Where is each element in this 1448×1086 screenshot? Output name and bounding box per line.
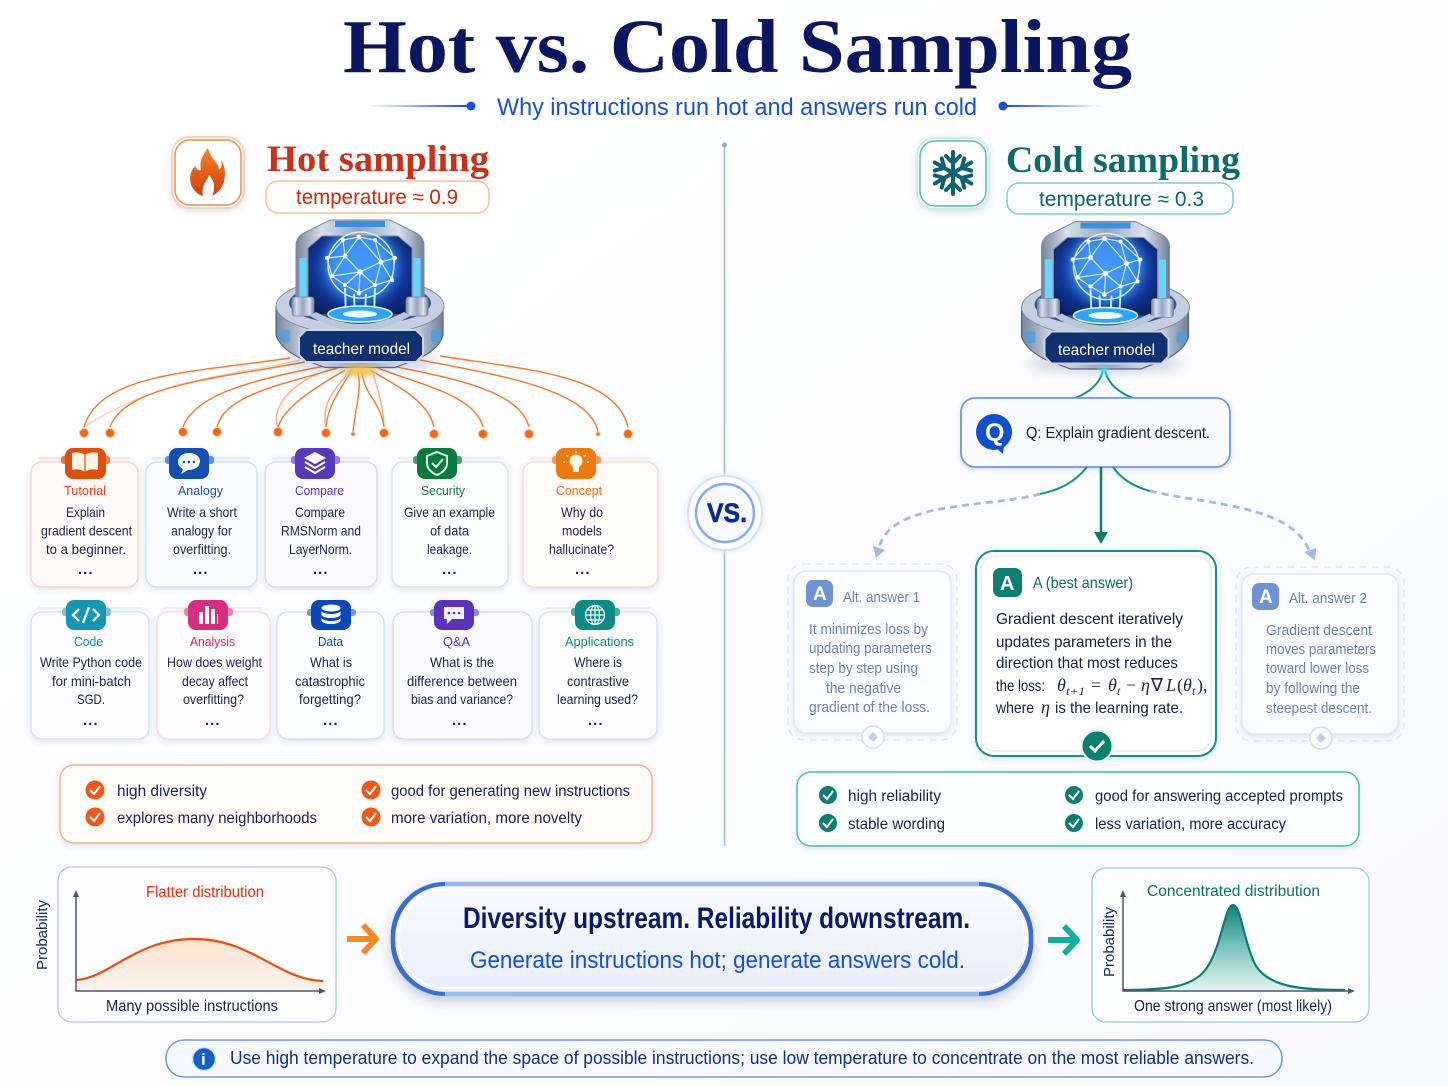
card: alt answer 2: A [1259, 587, 1273, 608]
card: data: catastrophic [295, 673, 365, 689]
footer note [166, 1040, 1282, 1077]
card: analogy: ... [193, 561, 209, 578]
card: tutorial: to a beginner. [46, 541, 126, 557]
equation: θ [1057, 675, 1066, 695]
card: compare: LayerNorm. [289, 541, 352, 557]
card: q&a: bias and variance? [411, 691, 513, 707]
card: analysis: decay affect [182, 673, 248, 689]
key message banner: Generate instructions hot; generate answers cold. [470, 947, 965, 974]
arrows: question to answers [873, 467, 1316, 560]
equation: ∇ [1150, 675, 1164, 695]
card: best answer: the loss: [996, 678, 1045, 695]
card: applications: learning used? [557, 691, 638, 707]
card: compare: ... [313, 561, 329, 578]
chart: concentrated distribution: One strong answer (most likely) [1134, 998, 1332, 1015]
panel: cold benefits [797, 772, 1359, 846]
vs. badge [686, 474, 764, 552]
temperature pill: cold [1007, 183, 1233, 214]
card: best answer: direction that most reduces [996, 655, 1178, 672]
card: data: What is [310, 654, 352, 670]
temperature pill: hot [266, 181, 489, 213]
connector: model to question [1073, 367, 1135, 399]
vs. badge: VS. [707, 498, 747, 528]
card: best answer: η [1041, 697, 1050, 717]
equation: θ [1108, 675, 1117, 695]
card: alt answer 2: Gradient descent [1266, 623, 1372, 639]
question box: Q [985, 419, 1004, 447]
panel: cold benefits: less variation, more accuracy [1095, 816, 1286, 833]
arrow: teal [1048, 926, 1077, 954]
fan of orange lines to instructions [80, 356, 632, 438]
card: concept: ... [575, 561, 591, 578]
card: analogy [146, 448, 257, 587]
card: alt answer 1: It minimizes loss by [809, 622, 929, 638]
card: code: SGD. [77, 691, 105, 707]
equation: = [1091, 675, 1101, 695]
teacher model: cold: teacher model [1058, 342, 1155, 359]
card: best answer [976, 551, 1216, 762]
card: tutorial: Tutorial [64, 483, 106, 498]
chart: flatter distribution [34, 867, 336, 1022]
card: analysis [157, 600, 270, 739]
icon: snowflake [917, 138, 989, 209]
card: alt answer 2: moves parameters [1266, 642, 1376, 658]
equation: η [1141, 675, 1150, 695]
temperature pill: cold: temperature ≈ 0.3 [1039, 188, 1204, 211]
card: alt answer 1: A [813, 584, 827, 605]
card: data: forgetting? [299, 691, 361, 707]
card: q&a [393, 600, 532, 739]
card: best answer: updates parameters in the [996, 634, 1172, 651]
heading: cold sampling: Cold sampling [1006, 140, 1241, 181]
icon: flame [172, 137, 244, 208]
panel: hot benefits: explores many neighborhoods [117, 810, 317, 827]
card: code: for mini-batch [52, 673, 131, 689]
card: q&a: What is the [430, 654, 494, 670]
panel: hot benefits: good for generating new instructions [391, 783, 630, 800]
card: code: ... [83, 712, 99, 729]
card: compare: Compare [295, 483, 344, 498]
chart: concentrated distribution: Probability [1101, 907, 1118, 977]
equation [1057, 675, 1208, 698]
card: concept: hallucinate? [549, 541, 614, 557]
card: tutorial: Explain [66, 504, 105, 520]
card: applications: Where is [574, 654, 622, 670]
panel: hot benefits: more variation, more novelty [391, 810, 582, 827]
card: applications: contrastive [567, 673, 629, 689]
teacher model: cold [1022, 222, 1190, 372]
card: data: Data [318, 634, 344, 649]
card: compare [265, 448, 377, 587]
subtitle with side rules [368, 94, 1102, 121]
equation: θ [1183, 675, 1192, 695]
card: applications: ... [588, 712, 604, 729]
subtitle with side rules: Why instructions run hot and answers run cold [497, 94, 977, 121]
panel: cold benefits: stable wording [848, 816, 945, 833]
card: security: Security [421, 483, 465, 498]
chart: concentrated distribution: Concentrated distribution [1147, 883, 1320, 900]
card: alt answer 1: Alt. answer 1 [843, 590, 920, 606]
card: concept: models [562, 522, 602, 538]
card: security: leakage. [427, 541, 472, 557]
equation: t [1117, 684, 1121, 698]
card: analogy: analogy for [171, 522, 232, 538]
card: concept: Why do [561, 504, 603, 520]
chart: flatter distribution: Many possible instructions [106, 998, 278, 1015]
temperature pill: hot: temperature ≈ 0.9 [296, 186, 458, 209]
teacher model: hot [276, 220, 444, 376]
card: alt answer 2: Alt. answer 2 [1289, 591, 1367, 607]
card: alt answer 1: gradient of the loss. [809, 700, 930, 716]
card: data [277, 600, 384, 739]
card: compare: RMSNorm and [281, 522, 361, 538]
card: security [392, 448, 508, 587]
card: security: Give an example [404, 504, 495, 520]
card: security: of data [430, 522, 469, 538]
card: q&a: ... [452, 712, 468, 729]
card: analysis: ... [205, 712, 221, 729]
card: code: Write Python code [40, 654, 142, 670]
equation: ( [1177, 675, 1183, 696]
card: alt answer 1: updating parameters [809, 641, 932, 657]
card: applications [539, 600, 657, 739]
equation: t [1192, 684, 1196, 698]
card: concept [523, 448, 658, 587]
card: alt answer 1 [788, 564, 957, 748]
teacher model: hot: teacher model [313, 341, 410, 358]
card: best answer: is the learning rate. [1055, 700, 1183, 717]
key message banner [393, 884, 1031, 994]
card: best answer: Gradient descent iteratively [996, 611, 1183, 628]
card: data: ... [323, 712, 339, 729]
panel: hot benefits: high diversity [117, 783, 207, 800]
card: alt answer 2: toward lower loss [1266, 661, 1369, 677]
card: q&a: Q&A [443, 634, 470, 649]
card: applications: Applications [565, 634, 634, 649]
equation: ), [1197, 675, 1208, 696]
card: best answer: A (best answer) [1033, 575, 1133, 592]
card: tutorial [31, 448, 138, 587]
card: alt answer 2: by following the [1266, 681, 1360, 697]
equation: − [1126, 675, 1136, 695]
card: tutorial: ... [78, 561, 94, 578]
card: analysis: Analysis [190, 634, 235, 649]
card: alt answer 2: steepest descent. [1266, 701, 1372, 717]
card: alt answer 1: the negative [826, 681, 901, 697]
footer note: Use high temperature to expand the space of possible instructions; use low temperature to concentrate on the most reliable answers. [230, 1048, 1254, 1068]
card: analogy: Analogy [178, 483, 223, 498]
equation: t+1 [1066, 684, 1085, 698]
card: code [31, 600, 149, 739]
card: analogy: Write a short [167, 504, 237, 520]
chart: flatter distribution: Flatter distribution [146, 884, 264, 901]
chart: concentrated distribution [1092, 868, 1369, 1022]
title: Hot vs. Cold Sampling [343, 5, 1132, 89]
question box: Q: Explain gradient descent. [1026, 425, 1210, 442]
panel: hot benefits [60, 765, 652, 843]
footer note: i [201, 1050, 206, 1069]
card: security: ... [442, 561, 458, 578]
card: code: Code [74, 634, 103, 649]
card: best answer: where [995, 700, 1034, 717]
equation: L [1165, 675, 1176, 695]
card: analogy: overfitting. [173, 541, 231, 557]
panel: cold benefits: good for answering accepted prompts [1095, 788, 1343, 805]
question box [961, 398, 1230, 467]
card: compare: Compare [295, 504, 345, 520]
card: tutorial: gradient descent [41, 522, 132, 538]
panel: cold benefits: high reliability [848, 788, 941, 805]
card: concept: Concept [556, 483, 602, 498]
card: best answer: A [1000, 573, 1014, 595]
card: q&a: difference between [407, 673, 517, 689]
chart: flatter distribution: Probability [34, 900, 51, 970]
card: analysis: overfitting? [183, 691, 244, 707]
arrow: orange [347, 925, 376, 953]
card: alt answer 2 [1236, 567, 1404, 749]
card: alt answer 1: step by step using [809, 661, 918, 677]
key message banner: Diversity upstream. Reliability downstream. [463, 902, 970, 935]
heading: hot sampling: Hot sampling [267, 139, 490, 180]
card: analysis: How does weight [167, 654, 262, 670]
